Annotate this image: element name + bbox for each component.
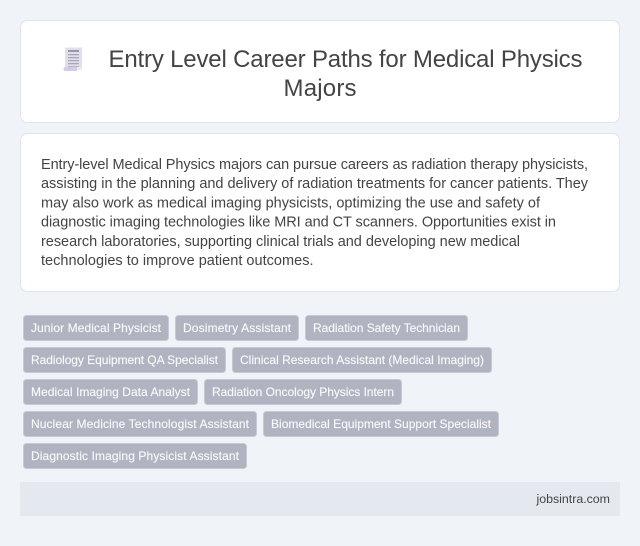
- text block: description paragraph: may also work as medical imaging physicists, optimizing the use and safety of: [41, 196, 541, 212]
- tag: Medical Imaging Data Analyst: [24, 380, 198, 404]
- tag: Clinical Research Assistant: Clinical Research Assistant (Medical Imaging): [240, 353, 484, 367]
- title: [108, 46, 582, 102]
- tag: Junior Medical Physicist: [24, 316, 168, 340]
- tag: Radiology Equipment QA Specialist: [24, 348, 226, 372]
- tag: Diagnostic Imaging Physicist Assistant: Diagnostic Imaging Physicist Assistant: [31, 449, 240, 463]
- panel: description: [20, 134, 620, 292]
- text block: description paragraph: technologies to improve patient outcomes.: [41, 253, 314, 269]
- tag: Nuclear Medicine Technologist Assistant: [24, 412, 256, 436]
- tag: Radiology Equipment QA Specialist: Radiology Equipment QA Specialist: [31, 353, 219, 367]
- tag: Radiation Safety Technician: [306, 316, 468, 340]
- tag: Radiation Safety Technician: Radiation Safety Technician: [313, 321, 460, 335]
- tag: Dosimetry Assistant: [176, 316, 298, 340]
- text block: description paragraph: diagnostic imaging technologies like MRI and CT scanners. Opportunities exist in: [41, 214, 556, 230]
- tag: Nuclear Medicine Technologist Assistant: Nuclear Medicine Technologist Assistant: [31, 417, 250, 431]
- tag: Medical Imaging Data Analyst: Medical Imaging Data Analyst: [31, 385, 191, 399]
- tag: Radiation Oncology Physics Intern: Radiation Oncology Physics Intern: [212, 385, 394, 399]
- text block: description paragraph: research laboratories, supporting clinical trials and developing new medical: [41, 234, 520, 250]
- title: Majors: [284, 75, 356, 102]
- icon: document scroll: [64, 48, 82, 71]
- footer source text: jobsintra.com: [536, 492, 610, 506]
- text block: description paragraph: [41, 157, 589, 269]
- footer bar: [20, 482, 620, 516]
- tag: Dosimetry Assistant: Dosimetry Assistant: [183, 321, 292, 335]
- text block: description paragraph: assisting in the planning and delivery of radiation treatments for cancer patients. They: [41, 176, 589, 192]
- panel: title header: [20, 20, 620, 122]
- tag: Radiation Oncology Physics Intern: [204, 380, 402, 404]
- panel: career tags: [24, 316, 498, 468]
- tag: Junior Medical Physicist: Junior Medical Physicist: [31, 321, 162, 335]
- title: Entry Level Career Paths for Medical Physics: [108, 46, 582, 73]
- text block: description paragraph: Entry-level Medical Physics majors can pursue careers as radiation therapy physicists,: [41, 157, 588, 173]
- tag: Clinical Research Assistant: [232, 348, 492, 372]
- tag: Diagnostic Imaging Physicist Assistant: [24, 444, 246, 468]
- tag: Biomedical Equipment Support Specialist: Biomedical Equipment Support Specialist: [271, 417, 492, 431]
- tag: Biomedical Equipment Support Specialist: [264, 412, 498, 436]
